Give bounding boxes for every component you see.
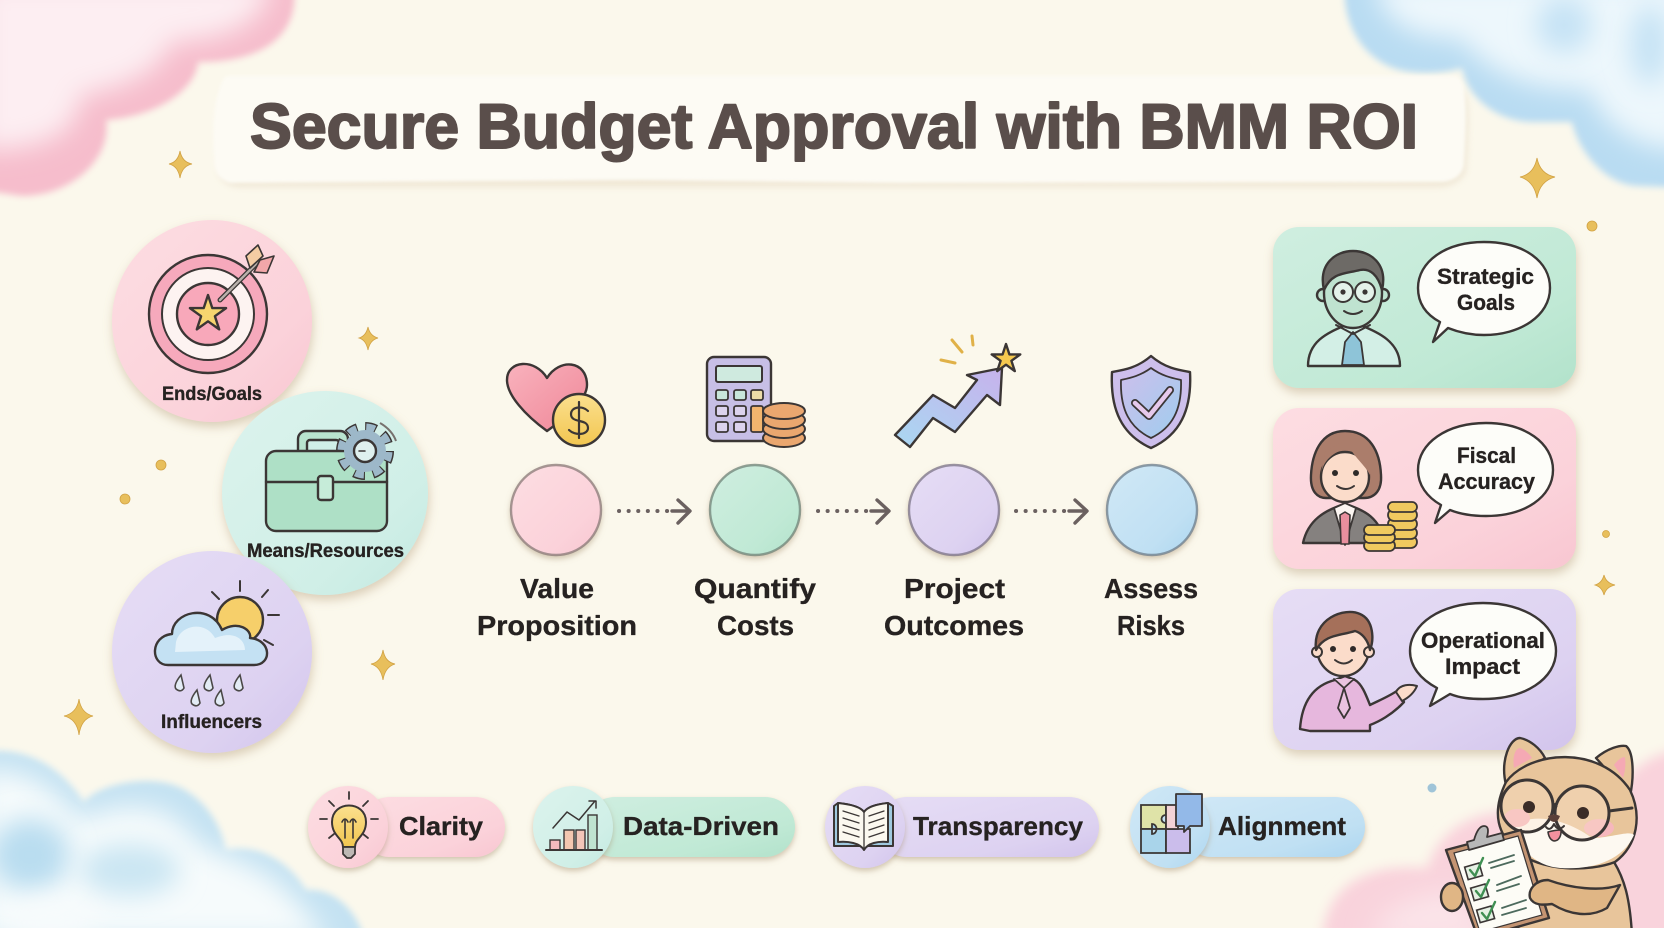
label: Quantify Costs: [694, 573, 816, 641]
icon: toolbox with gear: [266, 423, 396, 531]
card: Strategic Goals: [1273, 227, 1576, 388]
label: Means/Resources: Means/Resources: [247, 541, 404, 562]
label: Clarity: Clarity: [399, 811, 484, 841]
title banner: [213, 76, 1468, 187]
mascot: hamster with glasses and clipboard: [1441, 738, 1637, 928]
label: Quantify Costs: Costs: [717, 610, 794, 641]
arrow: value to costs: [619, 500, 690, 523]
cloud: bottom-left blue: [0, 751, 365, 928]
banner paper: [213, 76, 1468, 187]
icon: open book: [834, 803, 893, 850]
arrow: costs to outcomes: [818, 500, 889, 523]
speech bubble: Accuracy: [1438, 469, 1535, 494]
label: Ends/Goals: Ends/Goals: [162, 384, 262, 405]
arrow: outcomes to risks: [1016, 500, 1087, 523]
pill: Data-Driven: [533, 786, 795, 868]
pill: Transparency: [825, 786, 1099, 868]
panel: value pills: [308, 786, 1365, 868]
icon: cloud sun and rain: [155, 581, 279, 706]
label: Assess Risks: [1104, 573, 1198, 641]
label: Value Proposition: Value: [520, 573, 594, 604]
speech bubble: Fiscal: [1457, 443, 1516, 468]
icon: shield with check: [1112, 356, 1190, 448]
speech bubble: [1410, 603, 1556, 706]
card: Fiscal Accuracy: [1273, 408, 1576, 569]
cloud: top-left pink: [0, 0, 294, 196]
circle: Influencers: [112, 551, 312, 753]
label: Quantify Costs: Quantify: [694, 573, 816, 604]
nose and mouth: [1548, 814, 1560, 822]
panel: stakeholder cards: [1273, 227, 1576, 750]
circle node: blue: [1107, 465, 1197, 555]
decorative sparkles and dots: [64, 151, 1615, 792]
label: Project Outcomes: Project: [904, 573, 1005, 604]
title text: Secure Budget Approval with BMM ROI: [250, 92, 1418, 162]
speech bubble: [1418, 423, 1553, 523]
icon: heart with dollar coin: [507, 364, 605, 446]
cloud: top-right blue: [1344, 0, 1664, 188]
circle node: pink: [511, 465, 601, 555]
label: Assess Risks: Risks: [1117, 610, 1185, 641]
icon: puzzle pieces: [1141, 794, 1202, 853]
clipboard: [1446, 826, 1549, 928]
icon: target with star and dart: [149, 245, 274, 373]
gear: [341, 423, 396, 475]
icon: rising arrow with star: [895, 336, 1020, 447]
circle node: purple: [909, 465, 999, 555]
icon: light bulb: [320, 792, 378, 858]
label: Value Proposition: [477, 573, 637, 641]
icon: woman with coin stacks: [1303, 431, 1417, 551]
panel: process flow: [477, 336, 1198, 641]
label: Data-Driven: Data-Driven: [623, 811, 779, 841]
speech bubble: Goals: [1457, 290, 1515, 315]
step: Quantify Costs: [694, 357, 816, 641]
icon: bar chart with trend: [546, 801, 602, 850]
step: Project Outcomes: [884, 336, 1024, 641]
label: Project Outcomes: [884, 573, 1024, 641]
pill: Clarity: [308, 786, 505, 868]
circle node: mint: [710, 465, 800, 555]
panel: BMM circles: [112, 220, 428, 753]
icon: calculator with coins: [707, 357, 805, 447]
speech bubble: Strategic: [1437, 264, 1534, 289]
label: Transparency: Transparency: [913, 811, 1084, 841]
label: Assess Risks: Assess: [1104, 573, 1198, 604]
glasses: [1501, 780, 1553, 832]
paws: [1441, 880, 1620, 914]
label: Value Proposition: Proposition: [477, 610, 637, 641]
body: [1518, 860, 1632, 928]
speech bubble: [1418, 242, 1550, 342]
label: Alignment: Alignment: [1218, 811, 1346, 841]
card: Operational Impact: [1273, 589, 1576, 750]
circle: Means/Resources: [222, 391, 428, 595]
ears: [1504, 738, 1633, 796]
icon: man with glasses: [1308, 251, 1400, 366]
label: Project Outcomes: Outcomes: [884, 610, 1024, 641]
cloud: bottom-right pink: [1322, 748, 1664, 928]
step: Value Proposition: [477, 364, 637, 641]
speech bubble: Impact: [1445, 654, 1521, 679]
circle: Ends/Goals: [112, 220, 312, 422]
head: [1498, 757, 1637, 868]
label: Influencers: Influencers: [161, 712, 262, 733]
pill: Alignment: [1130, 786, 1365, 868]
step: Assess Risks: [1104, 356, 1198, 641]
speech bubble: Operational: [1421, 628, 1545, 653]
icon: man presenting: [1300, 612, 1417, 731]
